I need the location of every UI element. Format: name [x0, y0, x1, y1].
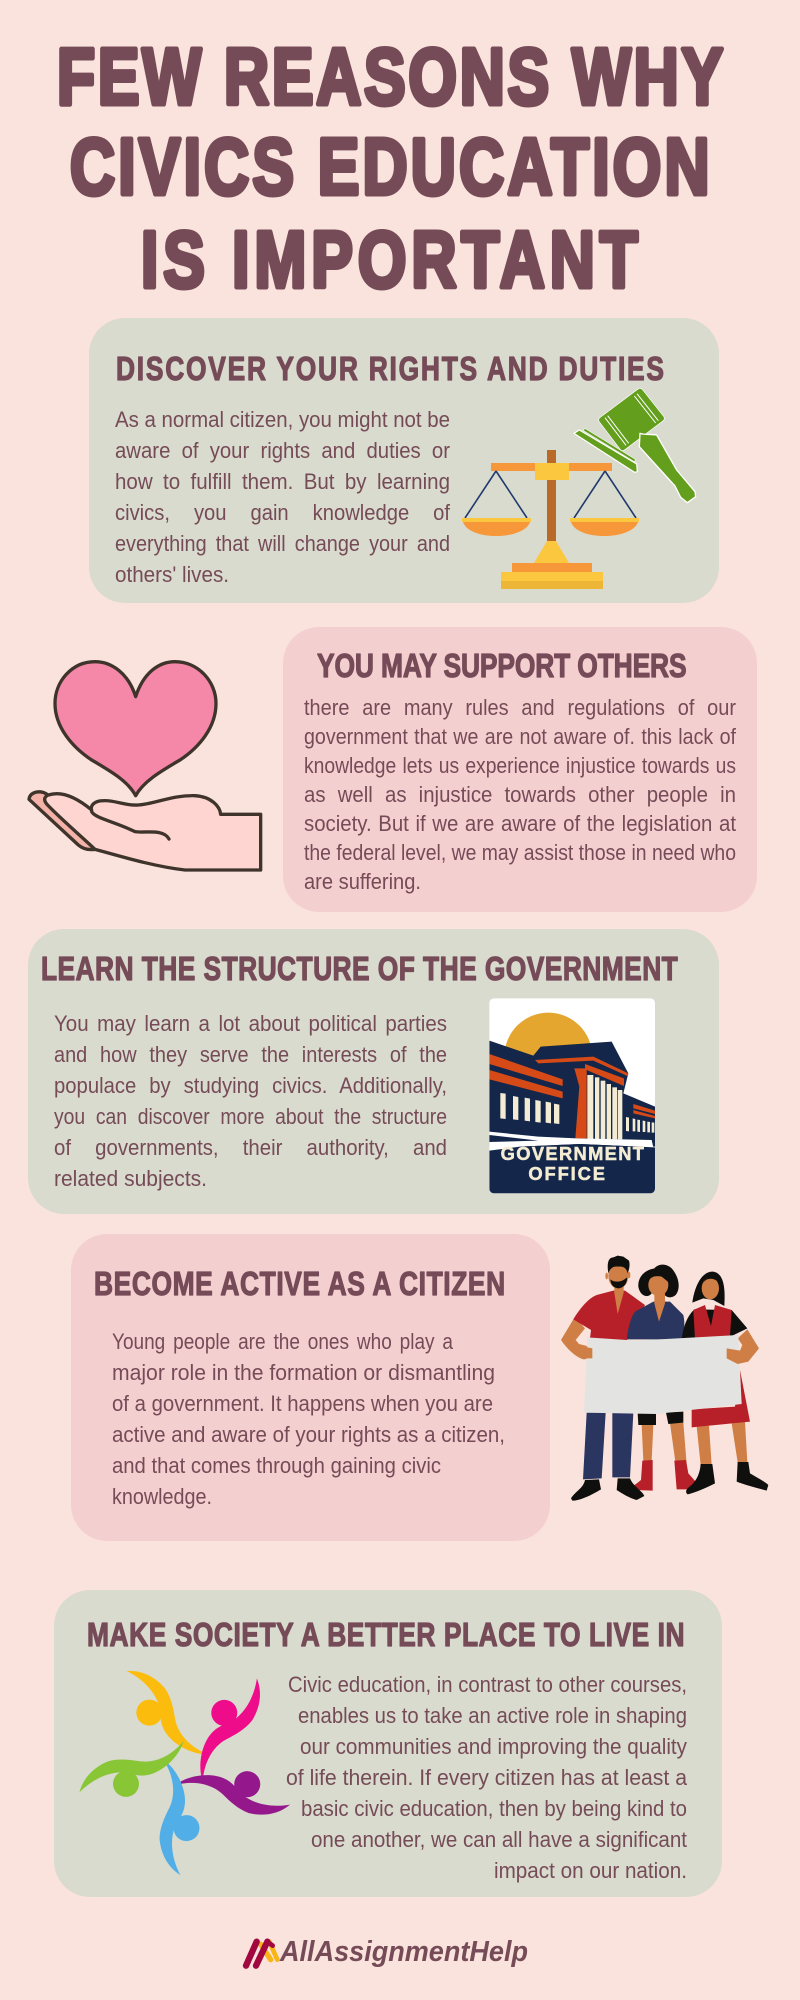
title: FEW REASONS WHY: [57, 33, 723, 122]
text: active body: [112, 1329, 505, 1509]
text: society body: [286, 1672, 688, 1883]
heading: you may support others: YOU MAY SUPPORT OTHERS: [317, 648, 687, 685]
text: society body: of life therein. If every citizen has at least a: [286, 1765, 688, 1790]
label: government office: [501, 1146, 644, 1180]
text: society body: Civic education, in contrast to other courses,: [288, 1672, 687, 1697]
panel: learn the structure of the government: [28, 929, 719, 1214]
text: discover body: aware of your rights and duties or: [115, 438, 450, 463]
icon: scales of justice: [462, 450, 639, 589]
label: government office: GOVERNMENT: [501, 1143, 644, 1164]
heading: learn the structure: LEARN THE STRUCTURE OF THE GOVERNMENT: [41, 951, 678, 988]
icon: hand holding heart: [29, 662, 261, 870]
text: discover body: [115, 407, 451, 587]
text: active body: and that comes through gaining civic: [112, 1453, 441, 1478]
text: active body: of a government. It happens when you are: [112, 1391, 493, 1416]
text: support body: there are many rules and regulations of our: [304, 695, 736, 720]
title: [57, 33, 723, 305]
text: support body: government that we are not aware of. this lack of: [304, 724, 737, 749]
text: support body: [304, 695, 737, 894]
text: structure body: you can discover more about the structure: [54, 1104, 447, 1129]
text: support body: knowledge lets us experience injustice towards us: [304, 753, 736, 778]
text: active body: Young people are the ones who play a: [112, 1329, 454, 1354]
icon: three people holding a banner: [561, 1256, 768, 1501]
title: IS IMPORTANT: [141, 216, 638, 305]
text: discover body: civics, you gain knowledge of: [115, 500, 451, 525]
panel: make society a better place: [54, 1590, 722, 1897]
text: active body: active and aware of your rights as a citizen,: [112, 1422, 505, 1447]
icon: gavel: [574, 391, 696, 503]
panel: you may support others: [283, 627, 757, 912]
title: CIVICS EDUCATION: [70, 123, 710, 212]
text: discover body: how to fulfill them. But by learning: [115, 469, 450, 494]
text: structure body: [54, 1011, 447, 1191]
panel: discover your rights and duties: [89, 318, 719, 603]
icon: five dancing figures: [79, 1671, 290, 1875]
panel: become active as a citizen: [71, 1234, 550, 1541]
text: discover body: everything that will change your and: [115, 531, 450, 556]
text: structure body: related subjects.: [54, 1166, 207, 1191]
icon: government office poster: [489, 998, 655, 1193]
text: discover body: others' lives.: [115, 562, 229, 587]
text: society body: our communities and improving the quality: [300, 1734, 687, 1759]
text: active body: knowledge.: [112, 1484, 212, 1509]
text: support body: the federal level, we may assist those in need who: [304, 840, 736, 865]
heading: become active: BECOME ACTIVE AS A CITIZEN: [94, 1266, 505, 1303]
text: society body: impact on our nation.: [494, 1858, 687, 1883]
icon: logo mark: [246, 1942, 277, 1966]
text: society body: one another, we can all have a significant: [311, 1827, 687, 1852]
text: structure body: of governments, their authority, and: [54, 1135, 447, 1160]
text: support body: society. But if we are aware of the legislation at: [304, 811, 736, 836]
heading: make society: MAKE SOCIETY A BETTER PLACE TO LIVE IN: [87, 1617, 685, 1654]
label: government office: OFFICE: [528, 1163, 605, 1184]
heading: discover your rights: DISCOVER YOUR RIGHTS AND DUTIES: [116, 351, 664, 388]
text: society body: basic civic education, then by being kind to: [301, 1796, 687, 1821]
text: discover body: As a normal citizen, you might not be: [115, 407, 450, 432]
text: active body: major role in the formation or dismantling: [112, 1360, 495, 1385]
text: structure body: and how they serve the interests of the: [54, 1042, 447, 1067]
text: structure body: You may learn a lot about political parties: [54, 1011, 447, 1036]
text: structure body: populace by studying civics. Additionally,: [54, 1073, 447, 1098]
text: support body: are suffering.: [304, 869, 421, 894]
logo: AllAssignmentHelp: AllAssignmentHelp: [279, 1936, 528, 1968]
text: society body: enables us to take an active role in shaping: [298, 1703, 687, 1728]
text: support body: as well as injustice towards other people in: [304, 782, 736, 807]
